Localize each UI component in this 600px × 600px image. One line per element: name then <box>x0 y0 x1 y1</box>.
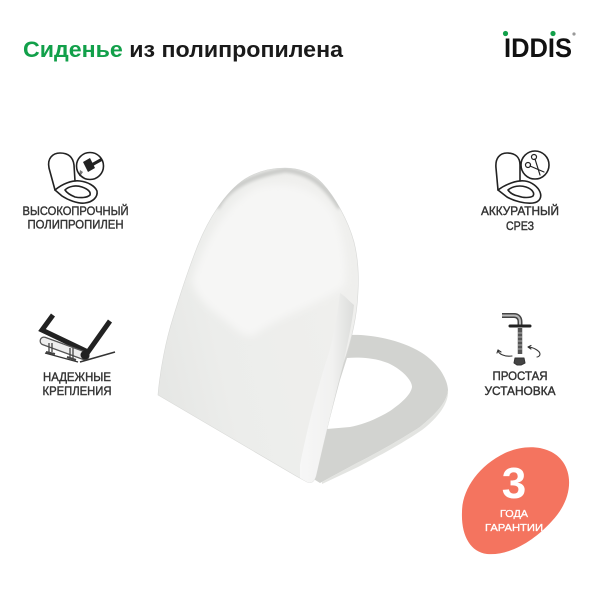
title: Сиденье из полипропилена <box>23 37 344 62</box>
label: ВЫСОКОПРОЧНЫЙ <box>22 203 128 218</box>
product: toilet seat <box>158 168 448 484</box>
logo: IDDIS: IDDIS <box>504 33 572 63</box>
icon: hammer <box>79 158 102 177</box>
feature: easy installation <box>484 316 556 398</box>
lid surface details <box>192 170 346 336</box>
lid rim highlight <box>300 293 354 483</box>
feature: accurate cut: СРЕЗ <box>506 219 534 233</box>
badge: 3-year warranty: 3 <box>502 459 526 508</box>
icon: hinge <box>42 315 115 362</box>
icon: bolt and nut <box>497 316 540 365</box>
feature: high-strength polypropylene: ПОЛИПРОПИЛЕН <box>28 218 124 232</box>
icon: seat with hammer <box>49 152 104 203</box>
feature: accurate cut <box>481 151 559 233</box>
badge: 3-year warranty: ГОДА <box>500 508 528 520</box>
icon: seat with scissors <box>496 151 549 203</box>
ring shading <box>322 390 448 484</box>
feature: high-strength polypropylene <box>22 152 128 232</box>
badge: 3-year warranty <box>462 447 569 554</box>
lid <box>158 168 358 483</box>
seat ring <box>312 335 448 483</box>
label: АККУРАТНЫЙ <box>481 203 559 218</box>
label: ПРОСТАЯ <box>492 369 548 383</box>
lid reflection <box>196 189 322 332</box>
badge: 3-year warranty: ГАРАНТИИ <box>485 522 543 534</box>
lid top edge shade <box>217 170 340 208</box>
icon: scissors <box>526 154 544 175</box>
label: НАДЕЖНЫЕ <box>43 370 111 384</box>
feature: reliable fasteners: КРЕПЛЕНИЯ <box>42 384 112 398</box>
feature: reliable fasteners <box>42 315 115 398</box>
feature: easy installation: УСТАНОВКА <box>484 384 556 398</box>
